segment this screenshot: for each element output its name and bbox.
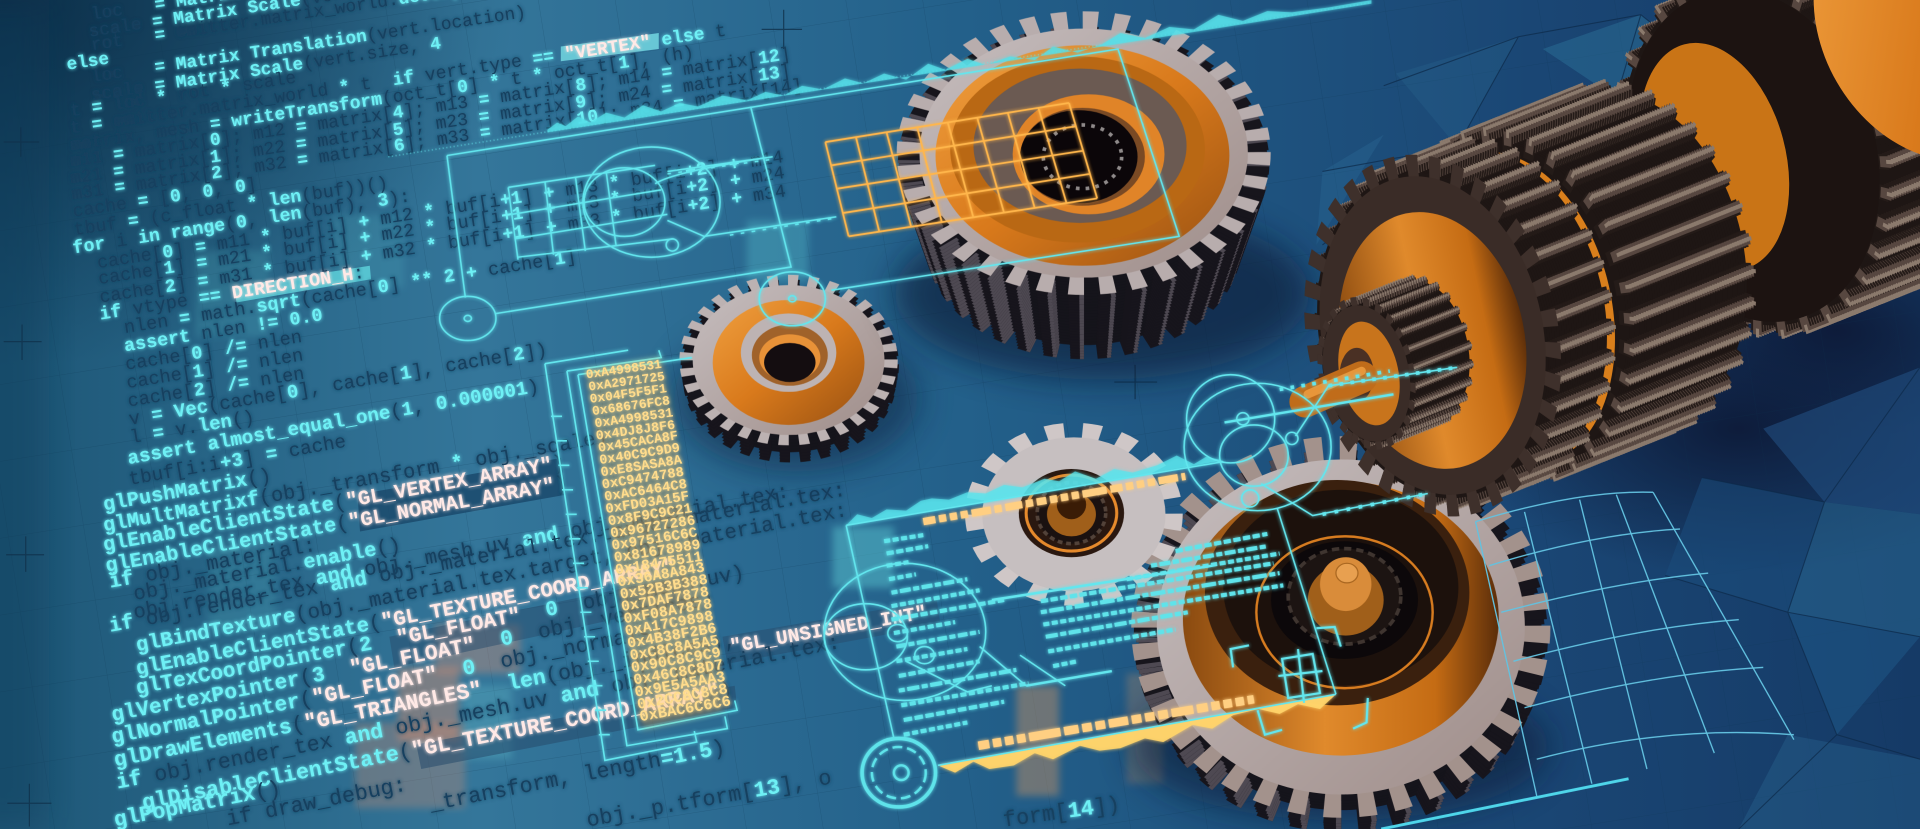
hex number column: 0x4B38F2B6 <box>626 619 718 653</box>
circles left <box>824 563 986 700</box>
hex number column: 0xE8SASA8A <box>600 453 684 481</box>
code listing: glTexCoordPointer(2 "GL_FLOAT" 0 obj._mesh.uv) <box>134 562 746 701</box>
bottom right line <box>1381 779 1629 829</box>
hud frames around hex column <box>545 350 737 760</box>
hex number column: 0x8F9C9C21 <box>607 501 693 530</box>
waveform yellow <box>938 694 1336 773</box>
code listing: glDisableClientState("GL_TEXTURE_COORD_ARRAY") <box>140 677 735 816</box>
hex number column: 0x96727286 <box>609 513 697 543</box>
code listing: glEnableClientState("GL_NORMAL_ARRAY") <box>104 473 569 579</box>
low poly triangles <box>1316 15 1920 829</box>
code listing: cache[1] = m21 * buf[i] + m22 * buf[i+1] + m23 * buf[i+2] + m24 <box>97 163 786 290</box>
code listing: loc = Matrix Translation(vert.location) <box>90 3 527 88</box>
translucent glow blocks <box>196 214 1163 808</box>
hex number column: 0x90C8C9C9 <box>630 644 722 677</box>
code listing: glEnableClientState("GL_VERTEX_ARRAY") <box>101 452 567 558</box>
gear: big top <box>894 20 1310 380</box>
waveform cyan <box>846 456 1223 525</box>
code listing: for i in range(0, len(buf), 3): <box>71 186 412 259</box>
frame <box>447 49 1179 290</box>
code listing: m31 = matrix[2]; m32 = matrix[6]; m33 = matrix[10]; m34 = matrix[14] <box>70 76 804 206</box>
code listing: cache[2] /= nlen <box>126 364 306 412</box>
code listing: if vtype == DIRECTION_H: <box>98 263 366 326</box>
frame <box>846 462 1336 765</box>
code listing: m21 = matrix[1]; m22 = matrix[5]; m23 = matrix[9]; m24 = matrix[13] <box>69 62 792 190</box>
code listing: glNormalPointer("GL_FLOAT" 0 obj._normals) <box>109 619 666 750</box>
wire grid bottom right <box>1476 492 1794 796</box>
code listing: _transform, length=1.5) <box>427 736 727 818</box>
code listing: cache = [0, 0, 0] <box>71 175 258 223</box>
code listing: obj._material.enable() <box>132 535 403 607</box>
registration crosshairs <box>4 10 1157 827</box>
hud panel: lower <box>824 367 1457 807</box>
gear: lower large <box>1133 448 1549 821</box>
code listing: tbuf[i:i+3] = cache <box>127 431 348 491</box>
code listing: l = v.len() <box>128 407 256 449</box>
hex number column: 0xA4998531 <box>585 357 663 382</box>
hex backing glow <box>585 358 725 730</box>
hex number column: 0xA4998531 <box>594 405 674 431</box>
hex number column: 0x68676FC8 <box>591 393 671 419</box>
hex number column: 0x4DJ8J8F6 <box>595 419 676 445</box>
code listing <box>65 0 1122 829</box>
gear: small middle-left <box>673 280 918 471</box>
hex number column: 0xFD03A15F <box>604 489 690 518</box>
hex number column <box>585 357 732 726</box>
code listing: if obj._material: <box>107 535 318 595</box>
code listing: glMultMatrixf(obj._transform * obj._scale) <box>101 427 610 538</box>
gear: small white <box>976 432 1172 597</box>
code listing: v = Vec(cache[0], cache[1], cache[2]) <box>127 339 549 431</box>
circles upper right <box>1184 383 1331 511</box>
far orange hub <box>1766 0 1920 204</box>
hex number column: 0x40C9C9D9 <box>598 441 681 469</box>
hex number column: 0xC8C8A5A5 <box>628 632 720 665</box>
hex number column: 0x97516C6C <box>611 525 699 555</box>
code listing: glEnableClientState("GL_TEXTURE_COORD_ARRAY") <box>134 554 690 682</box>
code listing: scale = Matrix Scale(vert.size, 4 <box>90 34 443 106</box>
code listing: glBindTexture(obj._material.tex.target, obj._material.tex: <box>134 500 849 658</box>
code listing: "GL_UNSIGNED_INT" <box>728 602 929 659</box>
hex number column: 0x2CC8C8C8 <box>636 680 729 714</box>
data rows right <box>1041 534 1283 666</box>
hex number column: 0x52B3B388 <box>619 573 709 604</box>
circle nodes <box>440 296 496 340</box>
pinion and shaft <box>1305 268 1485 456</box>
code listing: assert almost_equal_one(1, 0.000001) <box>126 376 541 470</box>
gear three with teeth bars <box>1578 0 1920 366</box>
code listing: cache[0] /= nlen <box>124 327 304 376</box>
hex number column: 0xC9474788 <box>601 465 685 494</box>
reticle <box>1231 627 1368 735</box>
code listing: glVertexPointer(3 "GL_FLOAT" 0 obj._vertices) <box>109 587 716 728</box>
code listing: m11 = matrix[0]; m12 = matrix[4]; m13 = matrix[8]; m14 = matrix[12] <box>69 45 792 172</box>
hex number column: 0x7DAF7878 <box>620 585 710 616</box>
code highlight boxes <box>235 33 940 769</box>
code listing: else <box>65 50 111 76</box>
code listing: obj.render_tex and obj._mesh.uv and obj._material.tex: <box>132 481 791 625</box>
code listing: cache[2] = m31 * buf[i] + m32 * buf[i+1] + m33 * buf[i+2] + m34 <box>98 181 787 308</box>
code listing: t = emitter.matrix_world * t if vert.type == "VERTEX" else t <box>69 22 728 139</box>
code listing: assert nlen != 0.0 <box>123 305 324 357</box>
code listing: tbuf = (c_float * len(buf))() <box>73 174 389 241</box>
inner grid <box>508 165 673 260</box>
orange grid <box>825 103 1097 236</box>
block rows <box>923 476 1185 522</box>
hex number column: 0xBAC6C6C6 <box>638 692 732 726</box>
ruler <box>388 2 1371 157</box>
hex number column: 0x9E5A5AA3 <box>633 668 727 702</box>
gear cluster: right shaft <box>1280 0 1920 530</box>
waveform upper <box>547 0 1371 132</box>
wheel node <box>862 738 936 807</box>
hex number column: 0xF08A7878 <box>623 597 714 628</box>
hud panel: upper <box>388 0 1371 340</box>
gear one with teeth bars <box>1280 118 1644 530</box>
code listing: nlen = math.sqrt(cache[0] ** 2 + cache[1] <box>123 247 578 339</box>
code listing: cache[0] = m11 * buf[i] + m12 * buf[i+1] + m13 * buf[i+2] + m14 <box>96 147 785 274</box>
code listing: cache[1] /= nlen <box>125 345 305 394</box>
code listing: matrix, mesh = writeTransform(oct_t[0] * t * oct_t[1], (h) <box>69 44 695 157</box>
hex number column: 0xAC6464C8 <box>603 477 688 506</box>
data rows left <box>884 535 1029 735</box>
hex number column: 0x04F5F5F1 <box>589 381 668 407</box>
code listing: glPushMatrix() <box>101 465 273 518</box>
hex number column: 0x46C8C8D7 <box>632 656 725 689</box>
code listing: t = loc * rot * scale <box>69 69 298 122</box>
hex number column: 0x18475511 <box>614 550 704 579</box>
connector lines <box>992 566 1212 600</box>
hex number column: 0x45CACA8F <box>597 429 679 457</box>
code listing: if obj.render_tex and obj._material.tex.target.material.tex: <box>107 480 848 639</box>
hex number column: 0xA17C9898 <box>624 609 715 640</box>
code listing: glDrawElements("GL_TRIANGLES" len(obj._indices), <box>112 629 738 773</box>
hex number column: 0x36A8A843 <box>616 560 706 591</box>
hex number column: 0x81678989 <box>613 538 702 567</box>
gear two with teeth bars <box>1351 58 1787 506</box>
code listing: if obj.render_tex and obj._mesh.uv and obj._material.tex: <box>114 631 842 795</box>
circles <box>583 147 720 257</box>
hex number column: 0xA2971725 <box>587 369 666 395</box>
